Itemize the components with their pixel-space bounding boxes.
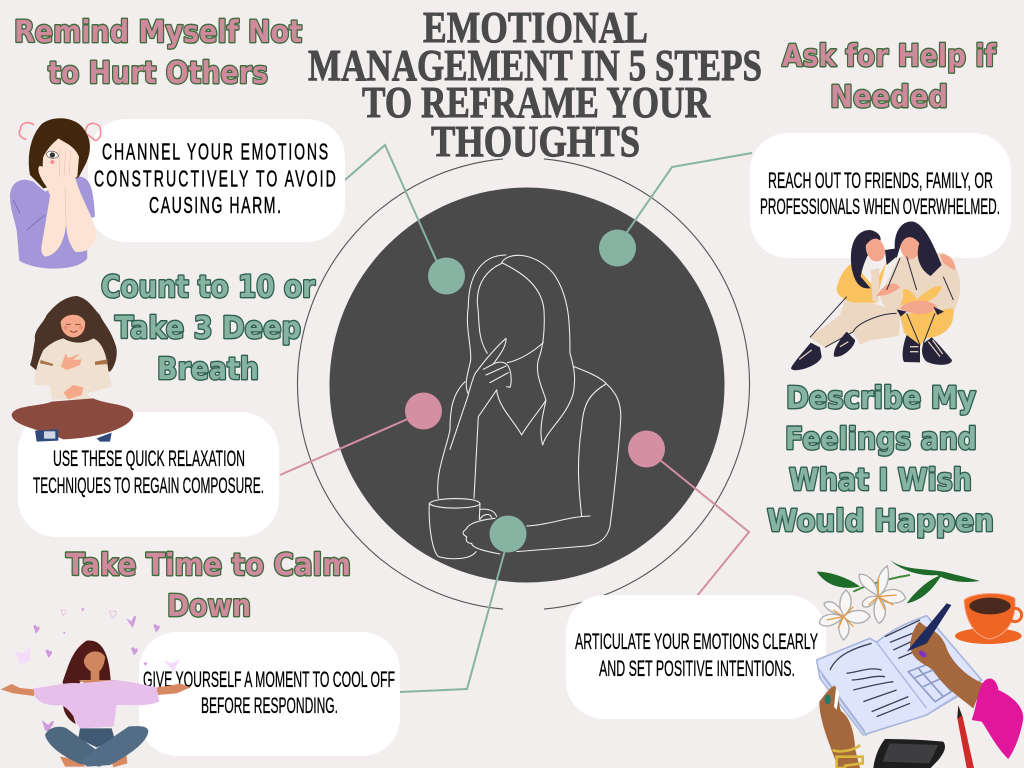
title: TO REFRAME YOUR [362, 78, 711, 127]
connector: describe feelings [660, 460, 749, 596]
heading: remind myself: to Hurt Others [48, 56, 268, 91]
dot: take time [490, 516, 526, 552]
outer ring [297, 159, 750, 609]
connector lines [280, 145, 752, 692]
connector: ask for help [625, 153, 752, 235]
card: relaxation: USE THESE QUICK RELAXATION [53, 446, 245, 471]
title: MANAGEMENT IN 5 STEPS [308, 41, 762, 90]
card: channel emotions: CAUSING HARM. [149, 192, 281, 219]
heading: remind myself [14, 15, 302, 91]
heading: describe feelings: Would Happen [767, 504, 994, 539]
heading: remind myself: Remind Myself Not [14, 15, 302, 50]
heading: describe feelings [767, 381, 994, 539]
dot: ask for help [599, 230, 636, 266]
card: channel emotions: CHANNEL YOUR EMOTIONS [102, 139, 328, 166]
node dots [405, 230, 665, 552]
central dark circle [330, 188, 724, 582]
card: channel emotions [88, 119, 345, 242]
heading: describe feelings: What I Wish [789, 463, 972, 498]
title: EMOTIONAL [423, 3, 648, 52]
connector: count to 10 [280, 418, 410, 475]
card: relaxation [18, 412, 279, 537]
card: cool off: GIVE YOURSELF A MOMENT TO COOL OFF [143, 667, 395, 692]
heading: take time [66, 548, 351, 624]
card: cool off: BEFORE RESPONDING. [201, 693, 338, 718]
central line figure: woman with coffee [429, 255, 621, 559]
heading: count to 10: Take 3 Deep [115, 311, 301, 346]
title: THOUGHTS [431, 117, 640, 166]
illustration: two women sitting [791, 221, 960, 370]
dot: remind myself [428, 258, 465, 294]
heading: describe feelings: Describe My [786, 381, 976, 416]
dot: count to 10 [405, 392, 442, 430]
heading: count to 10: Count to 10 or [101, 270, 315, 305]
illustration: woman with open arms and hearts [1, 608, 191, 767]
card: relaxation: TECHNIQUES TO REGAIN COMPOSURE. [33, 473, 264, 498]
card: articulate: ARTICULATE YOUR EMOTIONS CLEARLY [575, 629, 818, 654]
heading: take time: Down [167, 589, 251, 624]
heading: ask for help: Needed [830, 80, 948, 115]
card: articulate: AND SET POSITIVE INTENTIONS. [599, 656, 795, 681]
title [308, 3, 762, 166]
heading: describe feelings: Feelings and [785, 422, 977, 457]
heading: count to 10: Breath [157, 352, 259, 387]
connector: take time [400, 550, 505, 692]
card: reach out [750, 133, 1011, 258]
heading: ask for help: Ask for Help if [782, 39, 997, 74]
card: channel emotions: CONSTRUCTIVELY TO AVOID [94, 166, 336, 193]
connector: remind myself [345, 145, 437, 262]
illustration: journal, lilies and coffee [817, 560, 1023, 768]
card: cool off [139, 632, 400, 756]
illustration: meditating woman [12, 296, 133, 442]
card: articulate [566, 595, 826, 719]
heading: ask for help [782, 39, 997, 115]
dot: describe feelings [628, 430, 665, 468]
heading: take time: Take Time to Calm [66, 548, 351, 583]
heading: count to 10 [101, 270, 315, 387]
illustration: woman covering face [10, 118, 101, 269]
